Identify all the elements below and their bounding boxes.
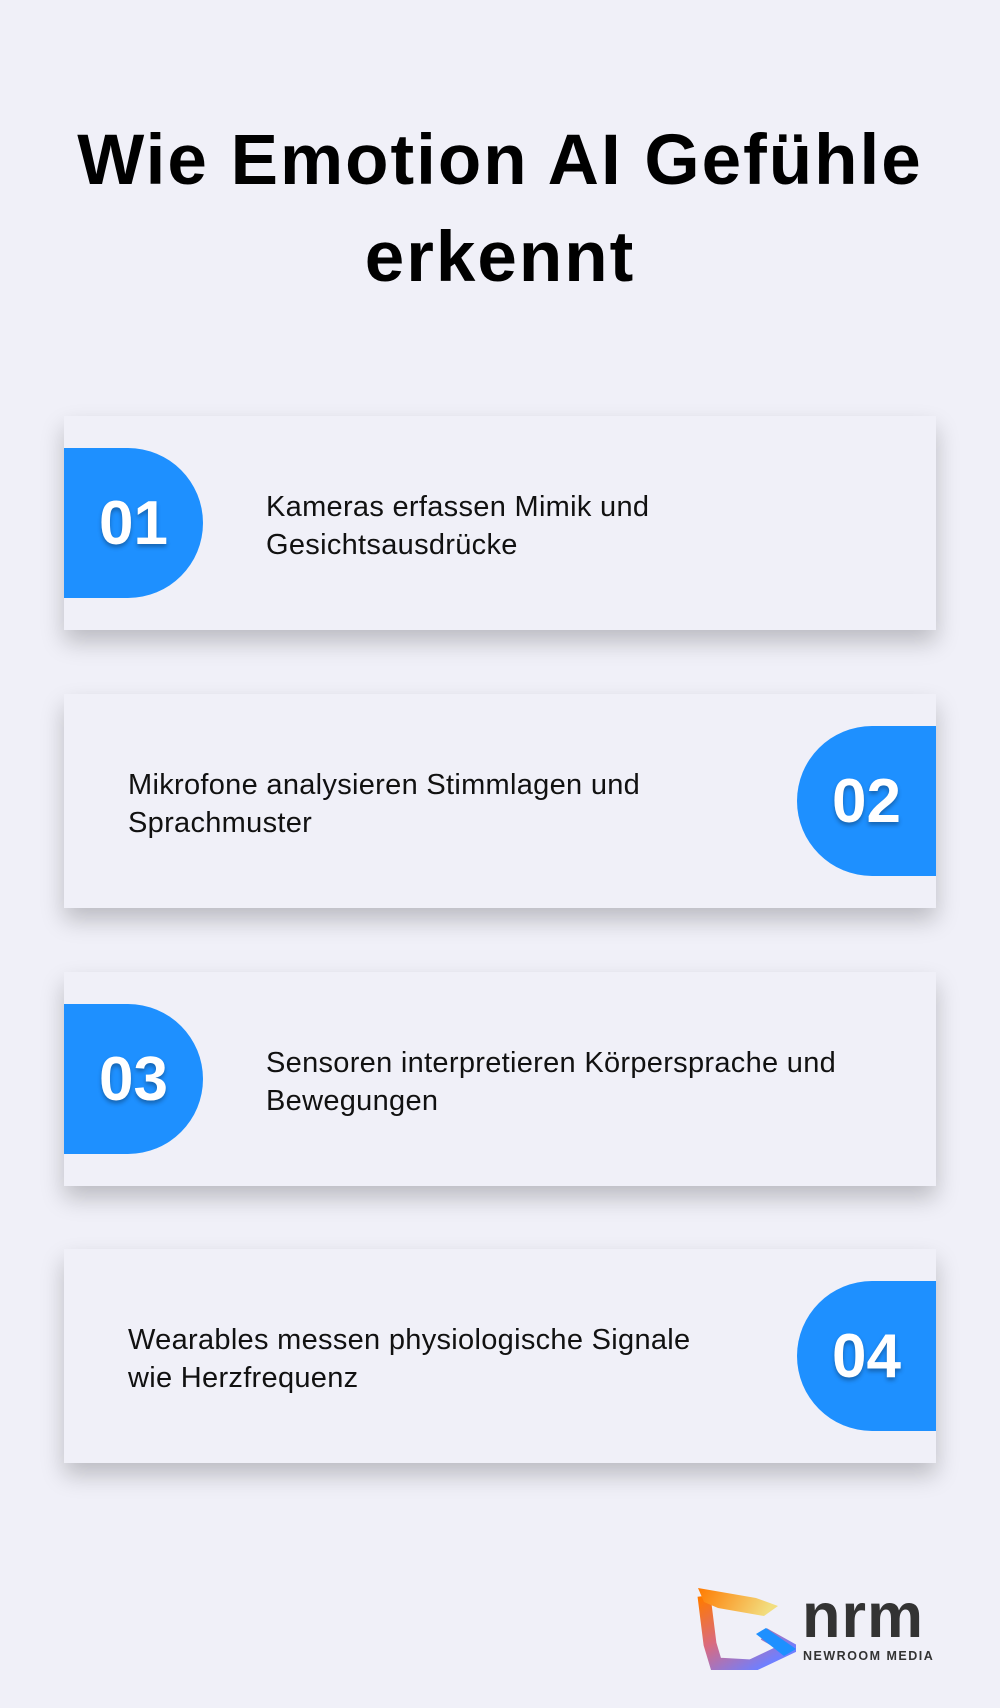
logo text: nrm [802, 1581, 924, 1651]
badge 04: 04 [832, 1322, 901, 1390]
text 04: wie Herzfrequenz [128, 1362, 358, 1394]
text 02 [128, 769, 640, 839]
text 03: Sensoren interpretieren Körpersprache und [266, 1047, 836, 1079]
title: Wie Emotion AI Gefühle [77, 121, 923, 200]
text 04: Wearables messen physiologische Signale [128, 1324, 690, 1356]
panel: step 04 [64, 1249, 936, 1463]
logo [698, 1581, 934, 1670]
title [77, 121, 923, 297]
logo: NEWROOM MEDIA [803, 1649, 934, 1663]
text 03 [266, 1047, 836, 1117]
badge 01: 01 [99, 488, 168, 558]
text 02: Mikrofone analysieren Stimmlagen und [128, 769, 640, 801]
text 01 [266, 491, 649, 561]
text 03: Bewegungen [266, 1085, 438, 1117]
badge 02 [797, 726, 936, 876]
panel: step 03 [64, 972, 936, 1186]
title: erkennt [365, 218, 635, 297]
text 01: Gesichtsausdrücke [266, 529, 518, 561]
text 01: Kameras erfassen Mimik und [266, 491, 649, 523]
badge 03: 03 [99, 1044, 168, 1114]
panel: step 02 [64, 694, 936, 908]
panel: step 01 [64, 416, 936, 630]
badge 02: 02 [832, 766, 901, 836]
text 02: Sprachmuster [128, 807, 312, 839]
badge 01 [64, 448, 203, 598]
badge 04 [797, 1281, 936, 1431]
badge 03 [64, 1004, 203, 1154]
icon: logo mark [698, 1588, 796, 1670]
text 04 [128, 1324, 690, 1394]
